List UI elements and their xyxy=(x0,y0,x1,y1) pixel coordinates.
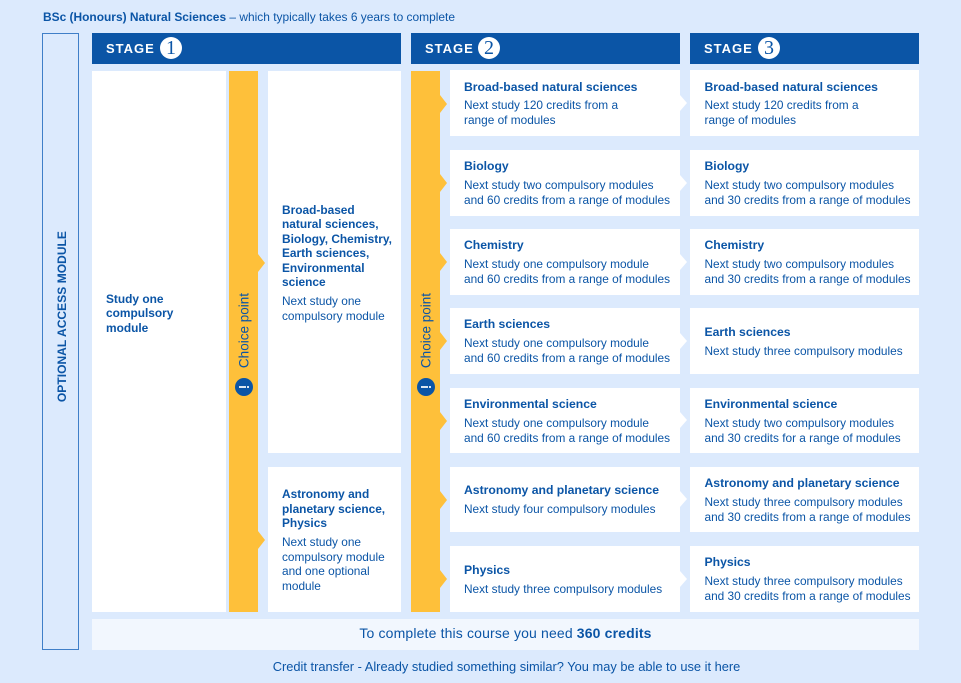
arrow: row 7 xyxy=(440,570,447,588)
stage 3 card: environmental science: Environmental science xyxy=(704,397,837,411)
choice point label: Choice point xyxy=(236,293,251,368)
stage 1 intro card: module xyxy=(106,321,148,335)
stage 3 card: biology: Biology xyxy=(704,159,749,173)
stage 1 option card: broad subjects: Earth sciences, xyxy=(282,246,369,260)
arrow: stage 2 to 3 row 5 xyxy=(680,412,687,428)
stage 3 card: broad-based: Broad-based natural sciences xyxy=(704,80,878,94)
stage 1 header: STAGE xyxy=(106,41,155,56)
arrow: stage 2 to 3 row 1 xyxy=(680,95,687,111)
stage 3 card: astronomy: and 30 credits from a range of modules xyxy=(704,510,911,524)
arrow: row 3 xyxy=(440,253,447,271)
stage 3 card: chemistry: Next study two compulsory modules xyxy=(704,257,894,271)
stage 3 card: chemistry: Chemistry xyxy=(704,238,764,252)
total credits bar xyxy=(92,619,919,650)
stage 3 card: physics: and 30 credits from a range of modules xyxy=(704,588,911,602)
stage 2 card: chemistry xyxy=(450,229,680,295)
stage 2 header: 2 xyxy=(484,37,494,59)
stage 1 option card: astronomy and physics: and one optional xyxy=(282,564,370,578)
stage 3 card: chemistry: and 30 credits from a range of modules xyxy=(704,272,911,286)
stage 1 option card: broad subjects xyxy=(268,71,401,453)
arrow: stage 2 to 3 row 4 xyxy=(680,333,687,349)
stage 2 card: environmental science xyxy=(450,388,680,453)
stage 3 header: STAGE xyxy=(704,41,753,56)
stage 2 card: chemistry: Next study one compulsory module xyxy=(464,257,649,271)
arrow: lower branch xyxy=(258,531,265,549)
stage 3 header xyxy=(690,33,919,64)
arrow: upper branch xyxy=(258,254,265,272)
stage 2 card: environmental science: Environmental science xyxy=(464,397,597,411)
arrow: row 6 xyxy=(440,491,447,509)
stage 1 option card: broad subjects: Broad-based xyxy=(282,203,355,217)
arrow: stage 2 to 3 row 6 xyxy=(680,491,687,507)
stage 1 option card: broad subjects: Environmental xyxy=(282,261,365,275)
stage 3 card: astronomy: Astronomy and planetary science xyxy=(704,476,900,490)
stage 1 option card: astronomy and physics: Physics xyxy=(282,516,327,530)
stage 3 card: astronomy xyxy=(690,467,919,532)
stage 1 option card: astronomy and physics: Astronomy and xyxy=(282,487,369,501)
stage 1 intro card xyxy=(92,71,226,612)
stage 2 card: physics xyxy=(450,546,680,612)
stage 1 intro card: compulsory xyxy=(106,306,173,320)
stage 3 card: earth sciences: Earth sciences xyxy=(704,325,791,339)
stage 3 card: astronomy: Next study three compulsory modules xyxy=(704,495,903,509)
arrow: row 4 xyxy=(440,332,447,350)
stage 2 card: broad-based: Broad-based natural sciences xyxy=(464,80,637,94)
arrow: stage 2 to 3 row 2 xyxy=(680,175,687,191)
stage 2 card: chemistry: and 60 credits from a range of modules xyxy=(464,272,670,286)
stage 2 card: earth sciences: and 60 credits from a range of modules xyxy=(464,350,670,364)
arrow: stage 2 to 3 row 7 xyxy=(680,571,687,587)
icon: info dot xyxy=(235,378,253,396)
stage 2 card: biology: Biology xyxy=(464,159,509,173)
stage 2 header xyxy=(411,33,680,64)
arrow: row 5 xyxy=(440,412,447,430)
stage 1 option card: broad subjects: Next study one xyxy=(282,294,361,308)
choice point bar 1 xyxy=(229,71,258,612)
stage 2 card: astronomy: Next study four compulsory modules xyxy=(464,502,656,516)
stage 3 header: 3 xyxy=(764,37,774,59)
arrow: row 2 xyxy=(440,174,447,192)
stage 3 card: earth sciences: Next study three compulsory modules xyxy=(704,344,903,358)
stage 2 card: environmental science: and 60 credits from a range of modules xyxy=(464,430,670,444)
stage 2 card: physics: Next study three compulsory modules xyxy=(464,582,662,596)
stage 1 option card: broad subjects: science xyxy=(282,275,326,289)
arrow: stage 2 to 3 row 3 xyxy=(680,254,687,270)
stage 1 option card: astronomy and physics: planetary science, xyxy=(282,502,385,516)
icon: info dot xyxy=(417,378,435,396)
optional access module panel: OPTIONAL ACCESS MODULE xyxy=(54,231,68,403)
stage 3 card: chemistry xyxy=(690,229,919,295)
stage 1 header: 1 xyxy=(166,37,176,59)
stage 2 card: chemistry: Chemistry xyxy=(464,238,524,252)
optional access module panel xyxy=(42,33,79,650)
stage 3 card: broad-based: range of modules xyxy=(704,112,796,126)
stage 1 option card: astronomy and physics: Next study one xyxy=(282,535,361,549)
stage 1 option card: broad subjects: compulsory module xyxy=(282,308,385,322)
stage 1 option card: astronomy and physics: module xyxy=(282,578,321,592)
stage 2 card: biology xyxy=(450,150,680,216)
stage 2 card: astronomy: Astronomy and planetary science xyxy=(464,483,659,497)
stage 2 card: astronomy xyxy=(450,467,680,532)
stage 2 card: broad-based: range of modules xyxy=(464,112,556,126)
stage 2 card: earth sciences: Earth sciences xyxy=(464,317,550,331)
stage 2 card: environmental science: Next study one compulsory module xyxy=(464,416,649,430)
stage 3 card: biology xyxy=(690,150,919,216)
stage 2 header: STAGE xyxy=(425,41,474,56)
stage 3 card: environmental science: and 30 credits for a range of modules xyxy=(704,430,901,444)
stage 3 card: environmental science xyxy=(690,388,919,453)
stage 1 option card: astronomy and physics: compulsory module xyxy=(282,550,385,564)
credit transfer note: Credit transfer - Already studied something similar? You may be able to use it here xyxy=(273,659,740,674)
stage 1 option card: astronomy and physics xyxy=(268,467,401,612)
arrow: row 1 xyxy=(440,95,447,113)
stage 3 card: environmental science: Next study two compulsory modules xyxy=(704,416,894,430)
stage 1 option card: broad subjects: natural sciences, xyxy=(282,217,378,231)
stage 3 card: physics xyxy=(690,546,919,612)
stage 3 card: biology: Next study two compulsory modules xyxy=(704,178,894,192)
stage 1 header xyxy=(92,33,401,64)
stage 3 card: broad-based xyxy=(690,70,919,136)
stage 2 card: biology: Next study two compulsory modules xyxy=(464,178,654,192)
stage 3 card: biology: and 30 credits from a range of modules xyxy=(704,192,911,206)
stage 2 card: earth sciences xyxy=(450,308,680,374)
stage 2 card: broad-based: Next study 120 credits from a xyxy=(464,98,618,112)
stage 3 card: physics: Physics xyxy=(704,555,751,569)
intro line: BSc (Honours) Natural Sciences – which typically takes 6 years to complete xyxy=(43,10,455,24)
stage 3 card: earth sciences xyxy=(690,308,919,374)
stage 2 card: broad-based xyxy=(450,70,680,136)
stage 3 card: physics: Next study three compulsory modules xyxy=(704,574,903,588)
choice point label: Choice point xyxy=(418,293,433,368)
total credits bar: To complete this course you need 360 credits xyxy=(359,625,652,641)
stage 2 card: physics: Physics xyxy=(464,563,510,577)
stage 3 card: broad-based: Next study 120 credits from a xyxy=(704,98,859,112)
stage 2 card: earth sciences: Next study one compulsory module xyxy=(464,336,649,350)
stage 1 option card: broad subjects: Biology, Chemistry, xyxy=(282,232,392,246)
stage 2 card: biology: and 60 credits from a range of modules xyxy=(464,192,670,206)
stage 1 intro card: Study one xyxy=(106,292,163,306)
choice point bar 2 xyxy=(411,71,440,612)
